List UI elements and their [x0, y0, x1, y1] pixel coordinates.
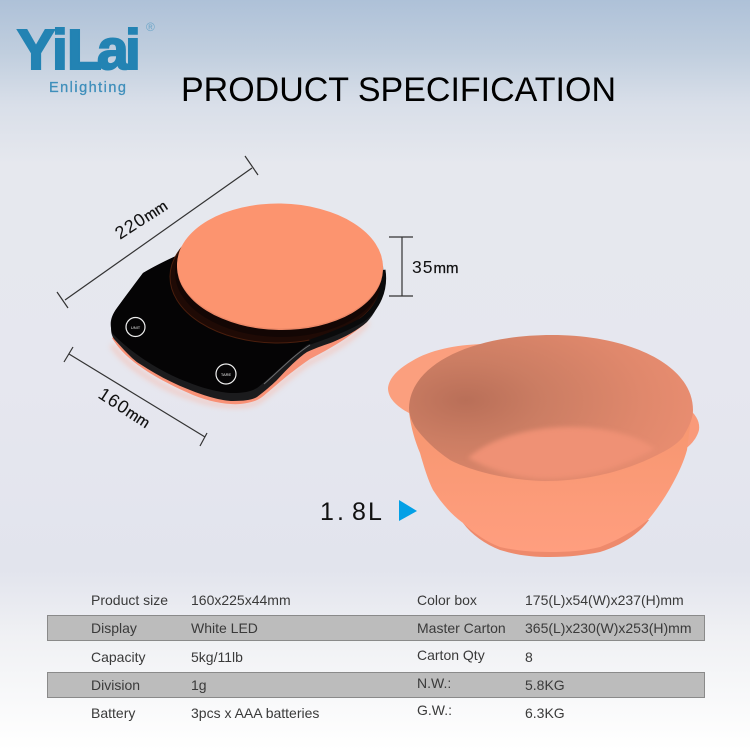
row: master carton: Master Carton [417, 620, 506, 636]
row: carton qty [417, 647, 533, 665]
scale tare button: TARE [221, 372, 232, 377]
row: battery [91, 705, 319, 721]
scale black body [111, 240, 384, 401]
logo registered mark: ® [146, 20, 155, 34]
capacity label [320, 498, 417, 526]
logo tagline: Enlighting [49, 80, 126, 96]
row: carton qty: 8 [525, 649, 533, 665]
row: product size: 160x225x44mm [191, 592, 291, 608]
row: battery: 3pcs x AAA batteries [191, 705, 319, 721]
row: color box: 175(L)x54(W)x237(H)mm [525, 592, 684, 608]
scale tare button [216, 364, 236, 384]
row band: division [48, 672, 704, 698]
bowl spout [660, 410, 699, 456]
dimension: 35mm [389, 237, 458, 296]
row: gross weight: G.W.: [417, 702, 452, 718]
scale unit button [126, 318, 145, 336]
row: master carton: 365(L)x230(W)x253(H)mm [525, 620, 691, 636]
scale glass highlight edge [264, 345, 310, 384]
row: master carton [417, 620, 691, 636]
bowl handle [388, 344, 482, 413]
row: capacity [91, 649, 243, 665]
row: division: Division [91, 677, 140, 693]
row: color box [417, 592, 684, 608]
dimension: 160mm [64, 347, 207, 446]
dimension: 220mm [57, 156, 258, 308]
row: capacity: Capacity [91, 649, 145, 665]
row: division [91, 677, 207, 693]
row: net weight: N.W.: [417, 675, 451, 691]
kitchen scale [111, 202, 384, 405]
bowl bottom highlight [468, 427, 655, 479]
bowl outer wall [409, 410, 692, 552]
bowl inner [409, 335, 693, 481]
row: net weight: 5.8KG [525, 677, 565, 693]
dimension line 220mm [57, 156, 258, 308]
row: capacity: 5kg/11lb [191, 649, 243, 665]
row: product size: Product size [91, 592, 168, 608]
scale orange base [112, 322, 367, 404]
dimension label 35mm: 35mm [412, 257, 458, 277]
row: display: White LED [191, 620, 258, 636]
bowl foot [463, 520, 649, 557]
scale amber ring under plate [169, 211, 383, 345]
scale unit button: UNIT [131, 325, 141, 330]
scale plate edge [176, 204, 384, 332]
row band: display [48, 616, 704, 640]
row: display: Display [91, 620, 137, 636]
logo [17, 18, 155, 96]
scale glass top face [111, 240, 380, 393]
row: battery: Battery [91, 705, 135, 721]
scale right rim [310, 270, 384, 342]
dimension line 160mm [64, 347, 207, 446]
row: division: 1g [191, 677, 207, 693]
icon: blue arrow [399, 500, 417, 521]
row: net weight [417, 675, 565, 693]
scale plate top [176, 202, 384, 330]
row: display [91, 620, 258, 636]
specification table [48, 592, 704, 721]
scale orange glow [112, 322, 368, 405]
row: color box: Color box [417, 592, 477, 608]
dimension label 220mm: 220mm [111, 195, 171, 243]
title: PRODUCT SPECIFICATION [181, 71, 616, 109]
row: gross weight [417, 702, 565, 721]
scale amber ring inner [174, 209, 384, 339]
row: gross weight: 6.3KG [525, 705, 565, 721]
dimension label 160mm: 160mm [95, 384, 154, 432]
mixing bowl [388, 335, 699, 557]
row: carton qty: Carton Qty [417, 647, 485, 663]
logo wordmark: YiLai [17, 18, 141, 82]
capacity text: 1.8L [320, 498, 382, 526]
dimension line 35mm [389, 237, 413, 296]
row: product size [91, 592, 291, 608]
